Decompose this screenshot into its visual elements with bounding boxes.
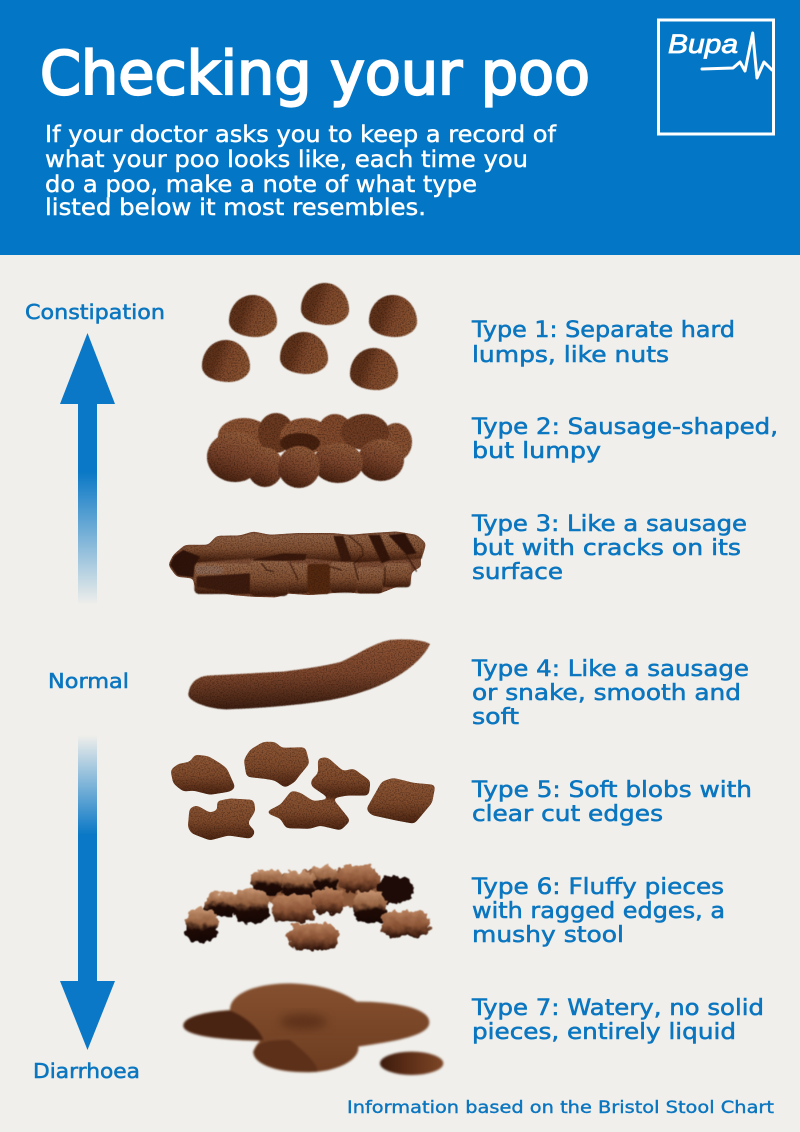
intro text — [45, 122, 557, 221]
label: type 6: with ragged edges, a — [472, 899, 725, 924]
label: type 3: but with cracks on its — [472, 536, 741, 561]
illustration: type 2 lumpy sausage — [207, 413, 412, 488]
title: Checking your poo — [40, 39, 590, 109]
illustration: type 1 lumps — [202, 283, 417, 390]
label: type 2: Type 2: Sausage-shaped, — [471, 415, 778, 440]
label: Constipation: Constipation — [25, 300, 165, 324]
label: type 1: lumps, like nuts — [472, 343, 669, 368]
label: type 4: Type 4: Like a sausage — [471, 657, 749, 682]
intro text: do a poo, make a note of what type — [45, 172, 477, 198]
illustration: type 5 soft blobs — [171, 742, 435, 840]
label: type 3 — [471, 512, 747, 585]
label: type 4 — [471, 657, 749, 730]
label: type 6: mushy stool — [472, 923, 624, 948]
label: type 6: Type 6: Fluffy pieces — [471, 875, 724, 900]
label: type 4: soft — [472, 705, 519, 730]
label: type 3: Type 3: Like a sausage — [471, 512, 747, 537]
label: type 5 — [471, 778, 752, 827]
scale labels and arrows — [25, 300, 165, 1083]
illustration: type 7 watery pool — [183, 983, 443, 1075]
label: type 6 — [471, 875, 725, 948]
header panel — [0, 0, 800, 255]
label: Normal: Normal — [48, 669, 129, 693]
arrow: up towards constipation — [60, 333, 115, 605]
label: type 1 — [471, 318, 735, 368]
Bupa logo: Bupa — [668, 29, 738, 59]
label: type 2 — [471, 415, 778, 464]
label: Diarrhoea: Diarrhoea — [33, 1059, 140, 1083]
arrow: down towards diarrhoea — [60, 735, 115, 1050]
intro text: listed below it most resembles. — [45, 195, 426, 221]
label: type 1: Type 1: Separate hard — [471, 318, 735, 343]
label: type 7: Type 7: Watery, no solid — [471, 996, 764, 1021]
label: type 3: surface — [472, 560, 563, 585]
illustration: type 3 cracked sausage — [168, 532, 426, 597]
illustration: type 6 fluffy pieces — [185, 865, 430, 950]
label: type 7 — [471, 996, 764, 1045]
intro text: If your doctor asks you to keep a record of — [45, 122, 557, 148]
label: type 5: clear cut edges — [472, 802, 663, 827]
label: type 7: pieces, entirely liquid — [472, 1020, 736, 1045]
intro text: what your poo looks like, each time you — [45, 147, 528, 173]
source note: Information based on the Bristol Stool Chart — [347, 1098, 774, 1118]
Bupa logo — [658, 20, 774, 134]
label: type 4: or snake, smooth and — [472, 681, 741, 706]
illustration: type 4 smooth sausage — [188, 639, 430, 709]
label: type 2: but lumpy — [472, 439, 601, 464]
label: type 5: Type 5: Soft blobs with — [471, 778, 752, 803]
